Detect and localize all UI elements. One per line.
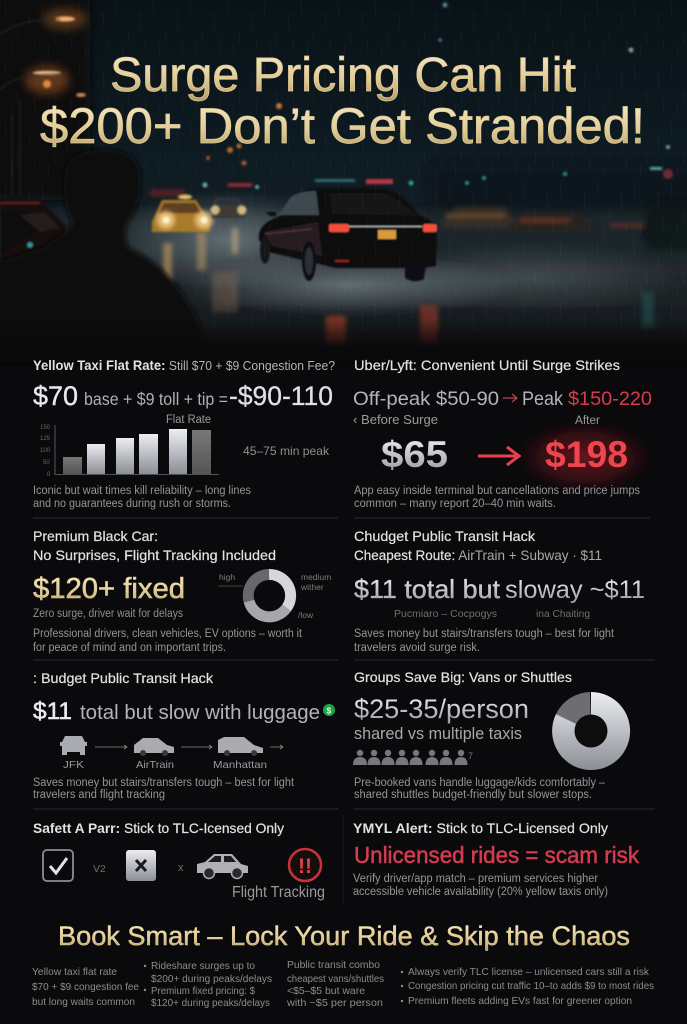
icon: x box [126, 850, 156, 881]
panel: cheapest route [354, 528, 645, 654]
summary column: public transit [286, 959, 384, 1009]
warning headline: Unlicensed rides = scam risk [354, 842, 639, 868]
summary column: public transit: Public transit combo [287, 959, 380, 971]
small labels: Pucmiaro – Cocpogys [394, 608, 497, 620]
description [353, 873, 608, 898]
fare range: Off-peak $50-90 [353, 388, 499, 410]
red arrow [478, 447, 519, 465]
summary column: safety and trends [401, 966, 654, 1007]
panel: groups vans and shuttles [353, 669, 630, 801]
before and after labels: ‹ Before Surge [353, 413, 438, 427]
price line: $11 total but [354, 574, 501, 604]
fade into dark panels [0, 318, 687, 348]
donut labels [218, 572, 331, 620]
panel: premium black car [33, 528, 331, 654]
price before: $65 [381, 434, 448, 475]
description: for peace of mind and on important trips. [33, 642, 226, 654]
description: common – many report 20–40 min waits. [354, 498, 556, 510]
summary column: taxi [32, 966, 139, 1008]
icon: green dollar [323, 704, 335, 716]
description: travelers and flight tracking [33, 789, 165, 801]
heading: Chudget Public Transit Hack [354, 528, 536, 544]
icon: car front [60, 736, 87, 755]
bar chart: flat rate: 125 [40, 436, 51, 442]
description [354, 628, 615, 654]
panel backing below the photo [0, 348, 687, 362]
donut labels: medium [301, 572, 331, 582]
bar chart: flat rate: 0 [47, 472, 51, 478]
summary column: safety and trends: Congestion pricing cut traffic 10–to adds $9 to most rides [408, 980, 654, 992]
distant buildings [0, 0, 687, 210]
flight tracking label: Flight Tracking [232, 884, 325, 901]
silhouette of a waiting person [0, 149, 211, 360]
taxi in background [152, 194, 213, 232]
description: Saves money but stairs/transfers tough – best for light [354, 628, 615, 640]
stop labels [63, 759, 267, 771]
fare range [353, 388, 652, 410]
donut labels: high [219, 572, 235, 582]
stop labels: JFK [63, 759, 84, 771]
bar chart: flat rate [40, 414, 219, 478]
icon: car side [134, 738, 174, 753]
wait time: 45–75 min peak [243, 444, 330, 458]
description [33, 628, 303, 654]
summary column: taxi: but long waits common [32, 996, 135, 1008]
label v2: V2 [93, 863, 106, 875]
heading: Cheapest Route: AirTrain + Subway · $11 [354, 547, 602, 563]
summary column: public transit: cheapest vans/shuttles [287, 973, 384, 985]
price after: $198 [545, 434, 628, 475]
summary column: safety and trends: Premium fleets adding EVs fast for greener option [408, 995, 632, 1007]
heading [354, 528, 602, 563]
panel: uber and lyft [353, 357, 653, 510]
fare formula: -$90-110 [229, 381, 333, 411]
description: Saves money but stairs/transfers tough – best for light [33, 777, 295, 789]
description [354, 777, 606, 801]
heading: Premium Black Car: [33, 528, 158, 544]
heading: Groups Save Big: Vans or Shuttles [354, 669, 572, 685]
description: travelers avoid surge risk. [354, 642, 480, 654]
icon: green dollar: $ [326, 706, 332, 716]
stop labels: Manhattan [213, 759, 267, 771]
price line [354, 574, 645, 604]
description: shared shuttles budget-friendly but slower stops. [354, 789, 592, 801]
summary column: taxi: $70 + $9 congestion fee [32, 981, 139, 993]
panel: yellow taxi flat rate [33, 357, 335, 510]
description: Professional drivers, clean vehicles, EV options – worth it [33, 628, 303, 640]
summary column: safety and trends: Always verify TLC license – unlicensed cars still a risk [408, 966, 650, 978]
route diagram [60, 736, 283, 771]
comparison: shared vs multiple taxis [354, 725, 522, 743]
road reflections [163, 228, 654, 346]
panel: safety tips [33, 820, 325, 901]
summary column: rideshare and premium: $120+ during peaks/delays [151, 997, 270, 1009]
panel: ymyl alert [353, 820, 639, 898]
icon: car [197, 854, 248, 878]
fare formula: base + $9 toll + tip = [84, 389, 228, 409]
wheels [140, 750, 257, 756]
description [354, 485, 640, 510]
note: Zero surge, driver wait for delays [33, 608, 183, 620]
blurred cars on the right [440, 202, 687, 250]
bar chart: flat rate: 50 [43, 460, 50, 466]
rain overlay [0, 0, 687, 340]
small labels [394, 608, 590, 620]
heading: : Budget Public Transit Hack [33, 670, 214, 686]
description: App easy inside terminal but cancellations and price jumps [354, 485, 640, 497]
description [33, 485, 251, 510]
fare formula: $70 [33, 381, 78, 411]
icon: van side [218, 737, 263, 753]
description: and no guarantees during rush or storms. [33, 498, 231, 510]
distant bokeh lights [150, 2, 673, 196]
summary column: taxi: Yellow taxi flat rate [32, 966, 117, 978]
donut chart [248, 574, 291, 617]
heading [33, 528, 276, 563]
price: $120+ fixed [33, 573, 185, 605]
price: $25-35/person [354, 694, 529, 724]
description: Verify driver/app match – premium services higher [353, 873, 598, 885]
price line: $11 [33, 698, 72, 725]
before and after labels [353, 413, 600, 427]
mist over road [105, 190, 687, 317]
dividers [33, 518, 655, 809]
label x: x [178, 862, 184, 874]
donut chart [552, 692, 630, 770]
arrows [95, 745, 283, 749]
heading: Yellow Taxi Flat Rate: Still $70 + $9 Congestion Fee? [33, 357, 335, 373]
price line: total but slow with luggage [80, 701, 320, 724]
description [33, 777, 295, 801]
street lamps [0, 9, 87, 195]
heading: YMYL Alert: Stick to TLC-Licensed Only [353, 820, 608, 836]
stop labels: AirTrain [136, 759, 174, 771]
fare range: $150-220 [568, 388, 652, 410]
main title: $200+ Don’t Get Stranded! [40, 98, 645, 154]
call to action heading: Book Smart – Lock Your Ride & Skip the Chaos [58, 921, 630, 951]
icon: red alert: !! [298, 855, 312, 878]
donut labels: wither [300, 582, 324, 592]
description: accessible vehicle availability (20% yellow taxis only) [353, 886, 608, 898]
summary column: public transit: with ~$5 per person [286, 997, 383, 1009]
bar chart: flat rate: 100 [40, 448, 51, 454]
fare formula [33, 381, 333, 411]
heading: Safett A Parr: Stick to TLC-Icensed Only [33, 820, 284, 836]
black sedan, rear three-quarter view [259, 188, 437, 281]
small labels: ina Chaiting [536, 608, 590, 620]
summary column: rideshare and premium: Rideshare surges up to [151, 960, 255, 972]
summary column: rideshare and premium: Premium fixed pricing: $ [151, 985, 255, 997]
main title [40, 48, 645, 154]
summary column: rideshare and premium [144, 960, 272, 1009]
icon: checkbox [43, 850, 73, 881]
donut labels: /low [298, 610, 314, 620]
description: Iconic but wait times kill reliability – long lines [33, 485, 251, 497]
second background car [210, 198, 246, 218]
description: Pre-booked vans handle luggage/kids comfortably – [354, 777, 606, 789]
heading: Uber/Lyft: Convenient Until Surge Strikes [354, 357, 620, 373]
summary column: rideshare and premium: $200+ during peaks/delays [151, 973, 272, 985]
icon: red alert [289, 849, 321, 881]
price line: sloway ~$11 [505, 576, 645, 604]
bar chart: flat rate: 150 [40, 425, 51, 431]
hero photo: rainy city street at night [0, 0, 687, 362]
red glow [517, 421, 653, 493]
heading: No Surprises, Flight Tracking Included [33, 547, 276, 563]
road surface [0, 212, 687, 360]
parked cars on the left [0, 199, 65, 280]
fare range: Peak [522, 388, 563, 410]
icon row: people: 7 [468, 751, 473, 761]
summary column: public transit: <$5–$5 but ware [287, 985, 365, 997]
icon row: people [353, 750, 473, 765]
before and after labels: After [575, 415, 600, 427]
bar chart: flat rate: Flat Rate [166, 414, 211, 426]
main title: Surge Pricing Can Hit [110, 48, 577, 102]
panel: budget public transit [33, 670, 335, 801]
